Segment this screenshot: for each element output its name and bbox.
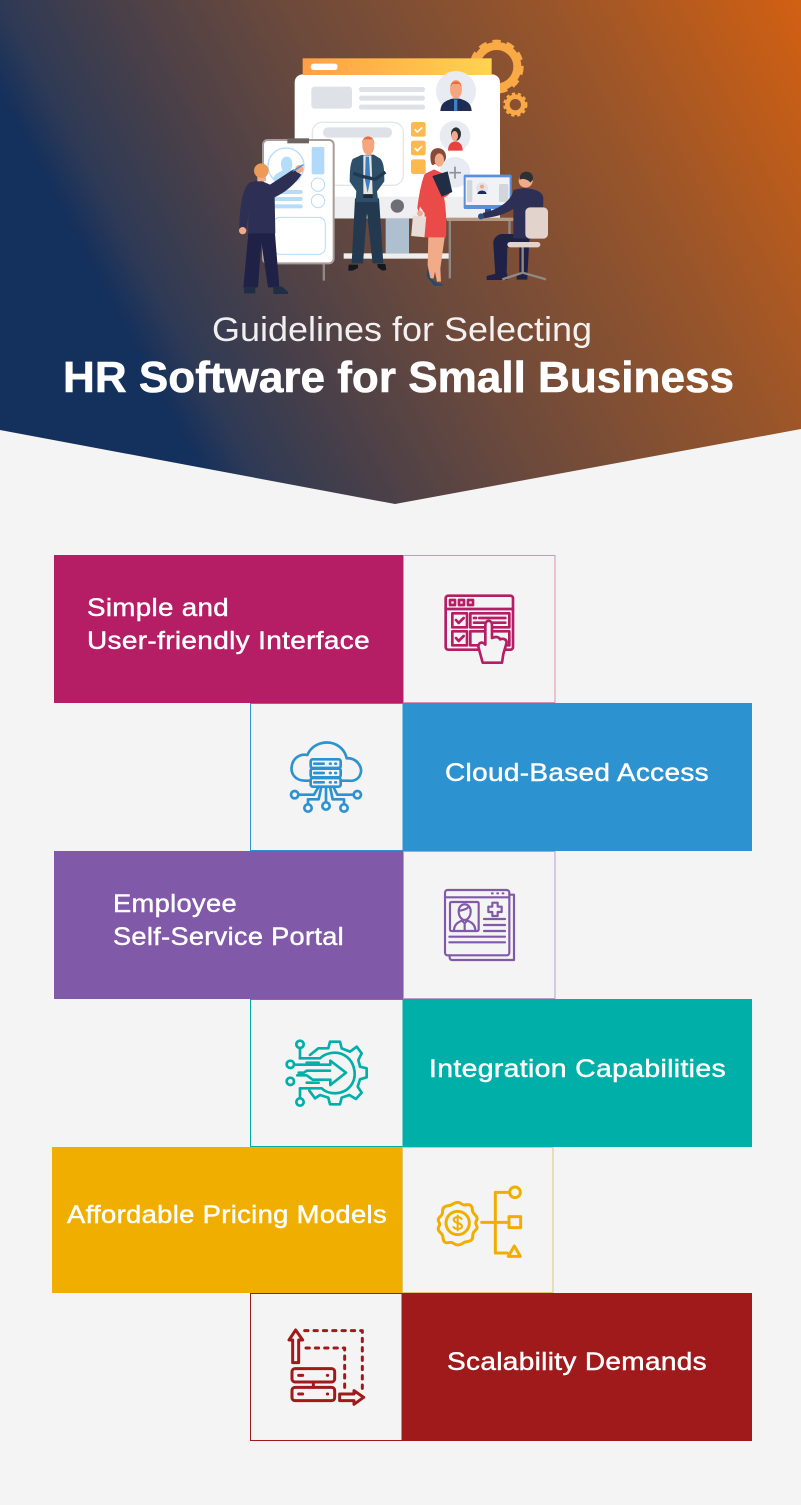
person: woman in red dress — [411, 148, 452, 286]
icon: interface with pointing hand — [446, 596, 513, 663]
icon: scaling servers with arrows — [289, 1330, 364, 1404]
flip chart board — [263, 138, 334, 281]
label text: Employee — [113, 890, 237, 918]
label text: Cloud-Based Access — [445, 759, 709, 787]
icon box — [402, 1148, 553, 1292]
icon: gear with arrow integration — [287, 1041, 367, 1106]
icon: pricing gear with options tree — [438, 1187, 521, 1256]
label text: Integration Capabilities — [429, 1055, 726, 1083]
header banner — [0, 0, 801, 504]
banner background — [0, 0, 801, 504]
icon: employee profile document — [445, 890, 514, 960]
colored label block — [54, 851, 403, 999]
colored label block — [54, 555, 403, 703]
label text: Self-Service Portal — [113, 923, 344, 951]
label text — [113, 890, 344, 951]
title line 2: HR Software for Small Business — [63, 353, 734, 402]
icon box — [250, 704, 403, 850]
label text — [87, 594, 370, 655]
colored label block — [402, 1293, 752, 1441]
person: man with folded arms — [348, 136, 386, 271]
panel: Integration Capabilities — [250, 999, 752, 1147]
title — [63, 311, 734, 402]
panel: Cloud-Based Access — [250, 703, 752, 851]
icon box — [404, 556, 555, 702]
desk and monitor — [447, 175, 515, 278]
colored label block — [403, 999, 752, 1147]
icon: gears — [472, 42, 526, 116]
title line 1: Guidelines for Selecting — [212, 311, 592, 349]
icon box — [250, 1294, 402, 1440]
person: man writing on board — [239, 163, 303, 294]
dashboard window — [295, 58, 500, 259]
label text: Scalability Demands — [447, 1348, 707, 1376]
colored label block — [52, 1147, 402, 1293]
icon box — [404, 852, 555, 998]
colored label block — [403, 703, 752, 851]
illustration: HR team with software dashboard — [239, 42, 548, 294]
person: seated man at desk with chair — [478, 172, 548, 280]
panel: Scalability Demands — [250, 1293, 752, 1441]
panel: Employee Self-Service Portal — [54, 851, 555, 999]
label text: Simple and — [87, 594, 229, 622]
panel: Affordable Pricing Models — [52, 1147, 553, 1293]
icon: cloud server network — [291, 742, 361, 812]
label text: User-friendly Interface — [87, 627, 370, 655]
label text: Affordable Pricing Models — [67, 1201, 387, 1229]
panel: Simple and User-friendly Interface — [54, 555, 555, 703]
icon box — [250, 1000, 403, 1146]
